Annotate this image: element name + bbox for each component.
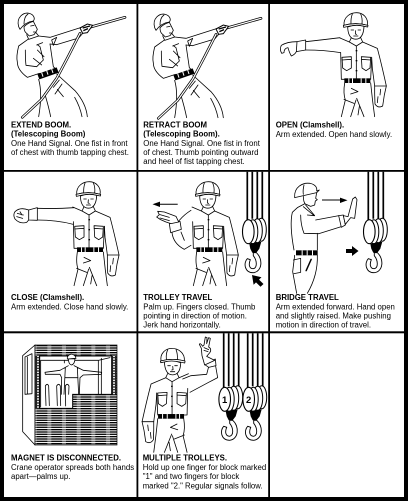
caption: trolley travel: TROLLEY TRAVEL	[143, 293, 213, 302]
icon: hook block 2: 2	[246, 395, 251, 406]
figure: signalman holding up two fingers	[142, 337, 218, 452]
caption: retract boom: One Hand Signal. One fist in front	[143, 139, 261, 148]
caption: open clamshell: OPEN (Clamshell).	[276, 121, 344, 130]
caption: trolley travel: Jerk hand horizontally.	[143, 320, 221, 329]
caption: multiple trolleys: marked "2." Regular signals follow.	[143, 481, 263, 490]
panel: trolley travel	[143, 172, 266, 329]
panel: extend boom	[11, 13, 129, 157]
caption: open clamshell: Arm extended. Open hand slowly.	[276, 130, 392, 139]
caption: bridge travel: motion in direction of travel.	[276, 320, 371, 329]
caption: retract boom	[143, 121, 261, 166]
icon: hook block 2	[243, 333, 267, 440]
icon: hook block	[364, 172, 387, 273]
caption: close clamshell	[11, 293, 128, 311]
panel: magnet is disconnected	[11, 345, 134, 481]
icon: hook block 1	[219, 333, 243, 440]
caption: extend boom: One Hand Signal. One fist in front	[11, 139, 128, 148]
caption: extend boom: EXTEND BOOM.	[11, 121, 71, 130]
caption: multiple trolleys	[143, 454, 266, 490]
panel: bridge travel	[276, 172, 395, 329]
arrow: trolley direction left	[152, 202, 178, 207]
figure: signalman with palm up, thumb pointing	[157, 182, 238, 286]
panel: open clamshell	[276, 13, 392, 139]
caption: retract boom: and heel of fist tapping chest.	[143, 157, 245, 166]
caption: close clamshell: CLOSE (Clamshell).	[11, 293, 84, 302]
caption: bridge travel: Arm extended forward. Hand open	[276, 302, 395, 311]
caption: extend boom: of chest with thumb tapping chest.	[11, 148, 129, 157]
icon: hook block 1: 1	[222, 395, 228, 406]
caption: open clamshell	[276, 121, 392, 139]
arrow: block movement	[252, 275, 264, 287]
panel: retract boom	[143, 14, 261, 166]
caption: magnet is disconnected	[11, 454, 134, 481]
panel: multiple trolleys	[142, 333, 267, 490]
caption: bridge travel	[276, 293, 395, 329]
caption: magnet is disconnected: apart—palms up.	[11, 472, 70, 481]
figure: signalman with boom pole, fist on chest	[153, 14, 261, 118]
figure: signalman with boom pole	[17, 13, 125, 117]
caption: extend boom: (Telescoping Boom)	[11, 130, 86, 139]
panel: close clamshell	[11, 182, 128, 311]
caption: trolley travel: pointing in direction of motion.	[143, 311, 247, 320]
caption: magnet is disconnected: MAGNET IS DISCONNECTED.	[11, 454, 121, 463]
figure: crane operator in cab	[23, 345, 117, 445]
caption: multiple trolleys: MULTIPLE TROLLEYS.	[143, 454, 227, 463]
caption: close clamshell: Arm extended. Close hand slowly.	[11, 302, 128, 311]
caption: retract boom: RETRACT BOOM	[143, 121, 207, 130]
caption: multiple trolleys: "1" and two fingers for block	[143, 472, 239, 481]
caption: trolley travel: Palm up. Fingers closed. Thumb	[143, 302, 256, 311]
arrow: bridge travel direction	[346, 246, 358, 256]
caption: magnet is disconnected: Crane operator spreads both hands	[11, 463, 134, 472]
icon: hook block	[242, 172, 266, 273]
caption: retract boom: (Telescoping Boom).	[143, 130, 220, 139]
caption: bridge travel: BRIDGE TRAVEL	[276, 293, 339, 302]
figure: signalman with arm extended and open hand	[280, 13, 386, 117]
caption: multiple trolleys: Hold up one finger for block marked	[143, 463, 266, 472]
figure: signalman with arm extended and closed fist	[14, 182, 119, 286]
arrow: bridge hand direction	[322, 198, 348, 203]
caption: retract boom: of chest. Thumb pointing outward	[143, 148, 258, 157]
caption: trolley travel	[143, 293, 256, 329]
figure: signalman in profile pushing forward	[291, 183, 357, 293]
caption: extend boom	[11, 121, 129, 157]
caption: bridge travel: and slightly raised. Make pushing	[276, 311, 391, 320]
